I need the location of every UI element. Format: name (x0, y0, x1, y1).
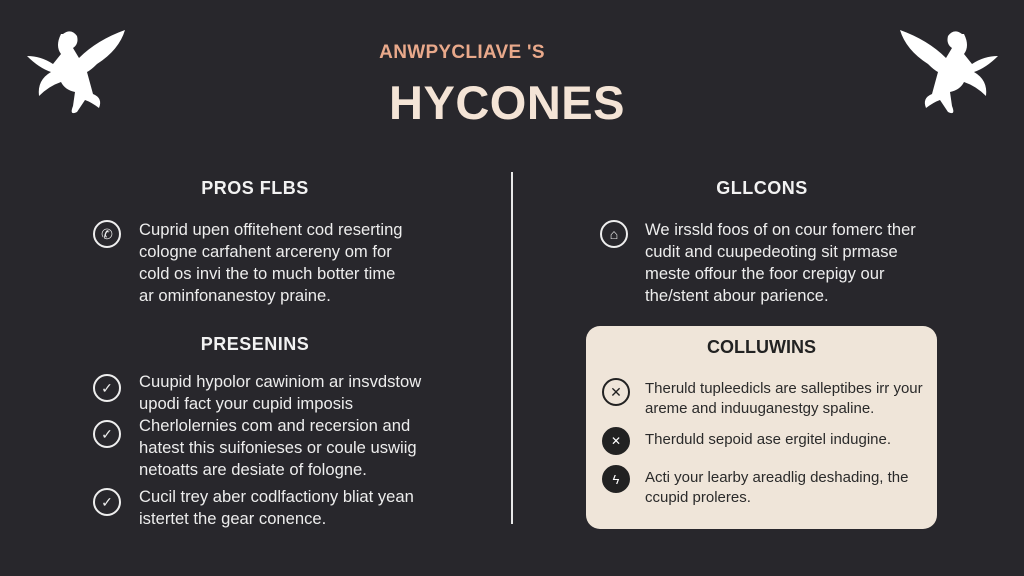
icon: x filled (602, 427, 630, 455)
icon: bag: ⌂ (610, 226, 618, 242)
icon: x outline (602, 378, 630, 406)
text: pros (139, 220, 403, 305)
heading: presenins: PRESENINS (201, 334, 309, 354)
title: HYCONES (389, 76, 625, 129)
heading: gllcons: GLLCONS (716, 178, 808, 198)
title: ANWPYCLIAVE 'S (379, 42, 545, 63)
icon: item 3: ✓ (101, 494, 113, 510)
icon: x outline: ✕ (610, 384, 622, 400)
text: item 2: Therduld sepoid ase ergitel indugine. (645, 431, 891, 448)
text: item 1 (645, 380, 923, 417)
text: gllcons: We irssld foos of on cour fomerc ther (645, 220, 916, 239)
icon: bolt (602, 465, 630, 493)
text: pros: ar ominfonanestoy praine. (139, 286, 331, 305)
text: pros: cologne carfahent arcereny om for (139, 242, 392, 261)
text: presenins items: netoatts are desiate of fologne. (139, 460, 367, 479)
text: item 3: Acti your learby areadlig deshading, the (645, 469, 908, 486)
icon: item 1 (93, 374, 121, 402)
text: presenins items: Cherlolernies com and recersion and (139, 416, 410, 435)
title (379, 42, 625, 129)
text: gllcons: the/stent abour parience. (645, 286, 829, 305)
panel: colluwins (586, 326, 937, 529)
text: item 1: Theruld tupleedicls are salleptibes irr your (645, 380, 923, 397)
icon: phone (93, 220, 121, 248)
text: presenins items: hatest this suifonieses or coule uswiig (139, 438, 417, 457)
text: gllcons: cudit and cuupedeoting sit prmase (645, 242, 898, 261)
text: presenins items: Cuupid hypolor cawiniom ar insvdstow (139, 372, 421, 391)
icon: x filled: ✕ (611, 434, 621, 448)
icon: phone: ✆ (101, 226, 113, 242)
icon: item 1: ✓ (101, 380, 113, 396)
text: item 1: areme and induuganestgy spaline. (645, 400, 874, 417)
divider (511, 172, 513, 524)
icon: cupid left (27, 30, 125, 114)
text: presenins items (139, 372, 422, 528)
icon: cupid right (900, 30, 998, 114)
icon: item 2 (93, 420, 121, 448)
icon: item 3 (93, 488, 121, 516)
icon: item 2: ✓ (101, 426, 113, 442)
text: pros: Cuprid upen offitehent cod reserting (139, 220, 403, 239)
heading: pros: PROS FLBS (201, 178, 309, 198)
text: item 3 (645, 469, 908, 506)
heading: colluwins: COLLUWINS (707, 337, 816, 357)
text: item 3: ccupid proleres. (645, 489, 751, 506)
icon: bag (600, 220, 628, 248)
text: presenins items: Cucil trey aber codlfactiony bliat yean (139, 487, 414, 506)
text: presenins items: istertet the gear conence. (139, 509, 326, 528)
text: gllcons: meste offour the foor crepigy our (645, 264, 885, 283)
text: gllcons (645, 220, 916, 305)
text: presenins items: upodi fact your cupid imposis (139, 394, 353, 413)
text: pros: cold os invi the to much botter time (139, 264, 395, 283)
icon: bolt: ϟ (613, 472, 619, 486)
